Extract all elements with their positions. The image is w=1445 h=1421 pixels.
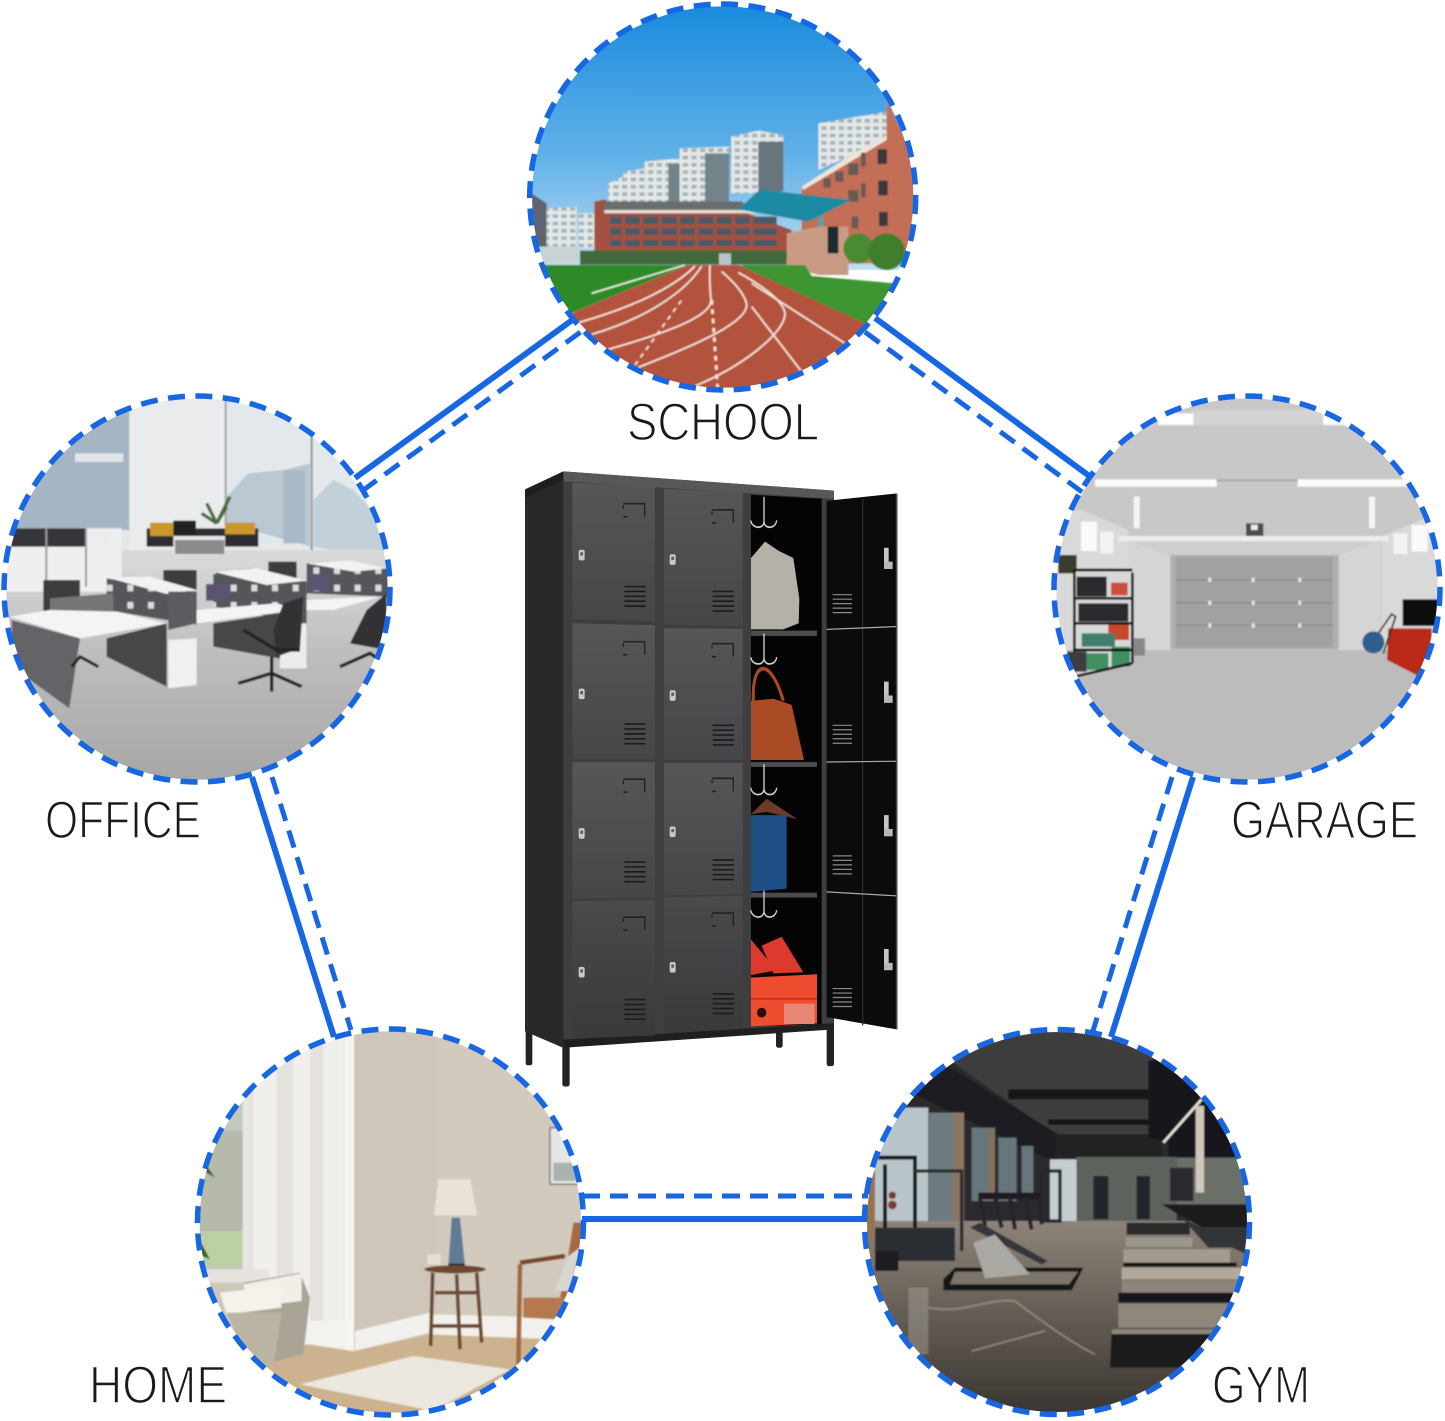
hanger and jeans [751,799,797,892]
orange shoe box [751,974,817,1027]
open compartments [751,495,822,1027]
connector lines: school to garage [865,318,1092,492]
connector lines: office to home [252,777,351,1037]
connector lines: garage to gym [1092,777,1193,1037]
label: gym: GYM [1212,1356,1310,1415]
scene circle: school [518,0,932,407]
locker doors, middle column [664,489,743,1033]
scene circle: office [0,383,407,797]
locker doors, left column [572,482,655,1039]
shirt on hanger [751,542,799,629]
connector lines: school to office [355,318,582,491]
locker cabinet [525,471,897,1087]
scene circle: gym [848,1014,1262,1421]
open door [827,493,897,1029]
cabinet body [525,471,834,1048]
label: office: OFFICE [45,791,201,850]
red shoes [751,937,803,975]
label: home: HOME [89,1356,227,1415]
label: school: SCHOOL [627,393,819,452]
scene circle: home [183,1014,597,1421]
handbag [751,669,804,760]
scene circle: garage [1038,383,1445,797]
connector lines: home to gym [582,1196,868,1219]
cabinet legs [526,1027,834,1087]
